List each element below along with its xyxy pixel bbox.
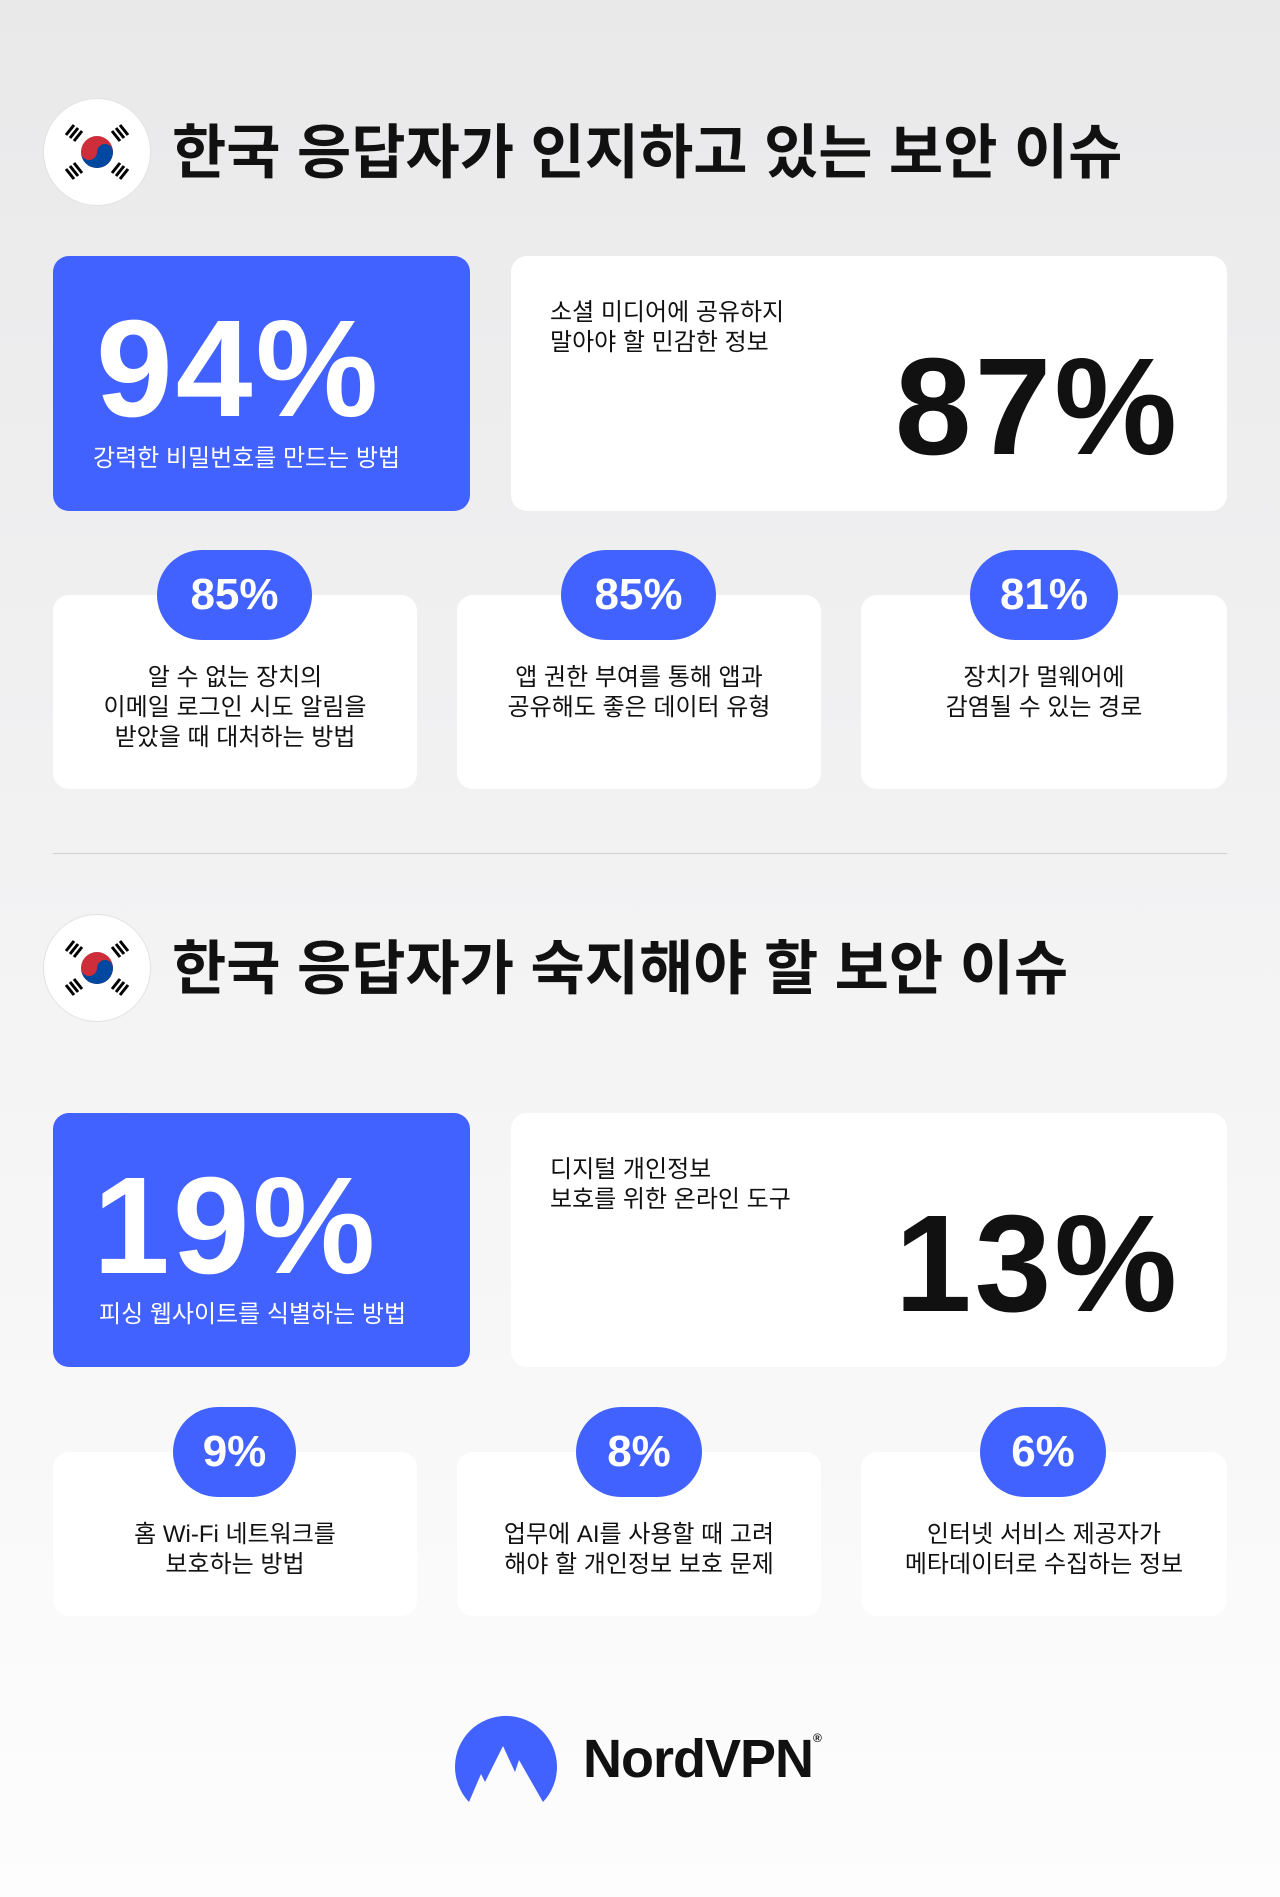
- title: section 2: 한국 응답자가 숙지해야 할 보안 이슈: [172, 936, 1068, 1002]
- label: 보호를 위한 온라인 도구: [550, 1186, 791, 1213]
- card: 85% a: 이메일 로그인 시도 알림을: [104, 694, 366, 721]
- label: 피싱 웹사이트를 식별하는 방법: [99, 1301, 406, 1328]
- pill 8%: 8%: [607, 1427, 671, 1476]
- flag icon: section 1: [44, 99, 150, 205]
- panel: 13%: [511, 1113, 1227, 1367]
- label: [550, 1156, 791, 1213]
- pill 9%: 9%: [203, 1427, 266, 1476]
- card: 85% b: 공유해도 좋은 데이터 유형: [508, 694, 770, 721]
- card: 81%: 감염될 수 있는 경로: [946, 694, 1142, 721]
- pill 6%: [980, 1407, 1106, 1497]
- title: section 1: 한국 응답자가 인지하고 있는 보안 이슈: [172, 120, 1122, 186]
- pill 81%: 81%: [1000, 570, 1088, 619]
- pill 9%: [173, 1407, 296, 1497]
- label: 소셜 미디어에 공유하지: [550, 299, 784, 326]
- card: 6%: [861, 1452, 1227, 1616]
- icon: mountain: [455, 1716, 557, 1802]
- label: 말아야 할 민감한 정보: [550, 329, 769, 356]
- card: 6%: 메타데이터로 수집하는 정보: [905, 1551, 1183, 1578]
- card: 8%: 해야 할 개인정보 보호 문제: [504, 1551, 774, 1578]
- pill 85%: 85%: [594, 570, 683, 619]
- label: 강력한 비밀번호를 만드는 방법: [93, 445, 400, 472]
- card: 81%: 장치가 멀웨어에: [963, 664, 1125, 691]
- card: 9%: [53, 1452, 417, 1616]
- card: 85% b: 앱 권한 부여를 통해 앱과: [515, 664, 763, 691]
- card: 81%: [861, 595, 1227, 789]
- card: 6%: 인터넷 서비스 제공자가: [927, 1521, 1161, 1548]
- card: 8%: [457, 1452, 821, 1616]
- panel: 19%: [53, 1113, 470, 1367]
- card: 9%: 보호하는 방법: [165, 1551, 305, 1578]
- stat 13%: 13%: [895, 1187, 1180, 1341]
- stat 19%: 19%: [93, 1149, 378, 1303]
- pill 81%: [970, 550, 1118, 640]
- wordmark: NordVPN®: [583, 1729, 821, 1789]
- stat 87%: 87%: [895, 330, 1180, 484]
- pill 85%: 85%: [190, 570, 279, 619]
- flag icon: section 2: [44, 915, 150, 1021]
- pill 6%: 6%: [1011, 1427, 1075, 1476]
- card: 85% a: 받았을 때 대처하는 방법: [115, 724, 355, 751]
- card: 85% b: [457, 595, 821, 789]
- panel: 87%: [511, 256, 1227, 511]
- card: 9%: 홈 Wi-Fi 네트워크를: [134, 1521, 336, 1548]
- pill 85%: [561, 550, 716, 640]
- card: 8%: 업무에 AI를 사용할 때 고려: [504, 1521, 774, 1548]
- pill 85%: [157, 550, 312, 640]
- card: 85% a: [53, 595, 417, 789]
- logo: NordVPN: [455, 1716, 822, 1802]
- label: 디지털 개인정보: [550, 1156, 711, 1183]
- pill 8%: [576, 1407, 702, 1497]
- panel: 94%: [53, 256, 470, 511]
- stat 94%: 94%: [96, 292, 381, 446]
- card: 85% a: 알 수 없는 장치의: [148, 664, 322, 691]
- label: [550, 299, 784, 356]
